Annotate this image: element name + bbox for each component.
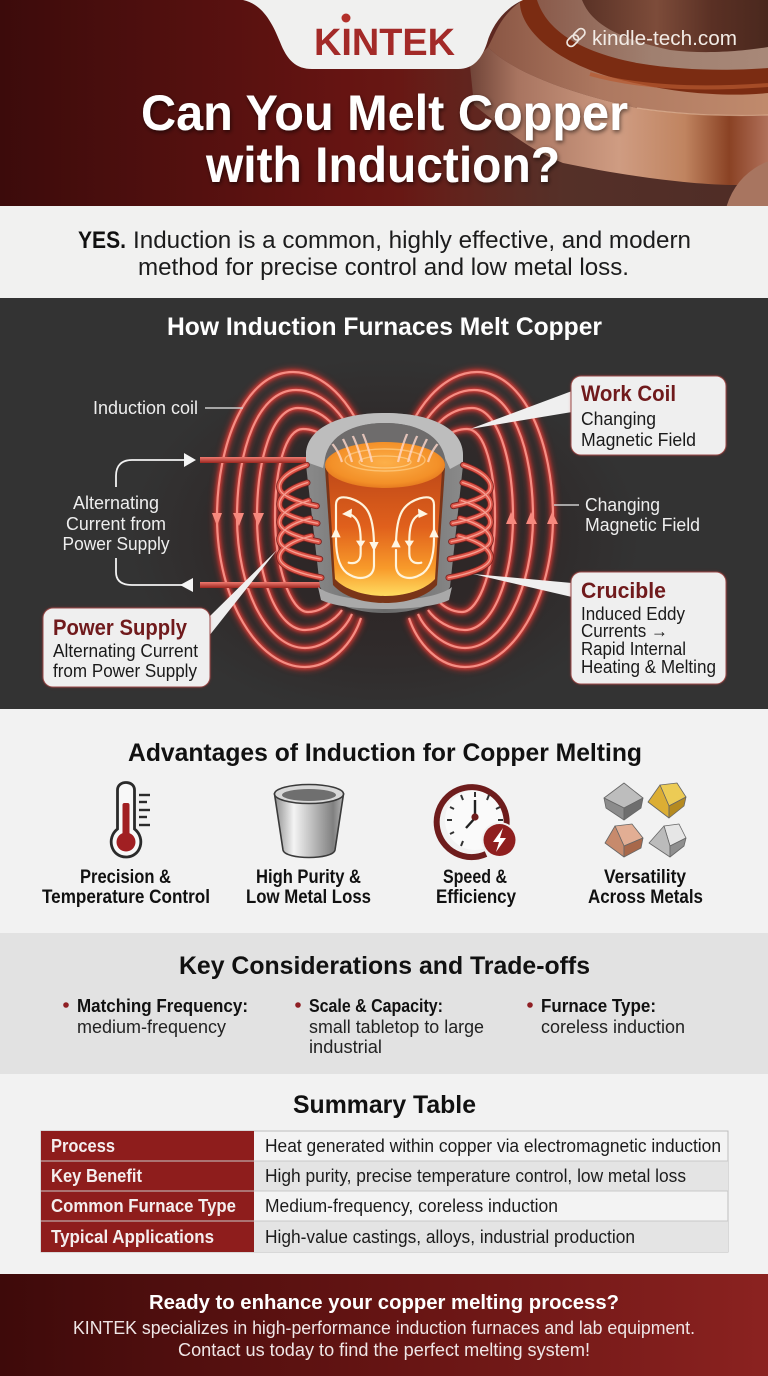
row: process: [51, 1136, 721, 1156]
advantage: high purity: [246, 784, 371, 908]
bullet: scale and capacity: industrial: [309, 1036, 382, 1057]
advantage: versatility: [588, 783, 703, 908]
diagram: copper work coil: [279, 465, 491, 578]
panel: short answer: Induction is a common, highly effective, and modern: [133, 227, 691, 254]
advantage: precision and temperature control: Temperature Control: [42, 887, 210, 908]
panel: call to action footer: Contact us today to find the perfect melting system!: [178, 1339, 590, 1360]
panel: summary table: [0, 1074, 768, 1274]
advantage: precision and temperature control: Precision &: [80, 867, 171, 888]
callout: crucible: Crucible: [581, 578, 666, 603]
logo: KINTEK: KINTEK: [314, 22, 456, 64]
callout: work coil: [470, 376, 726, 455]
title: with Induction?: [205, 137, 560, 193]
label: changing magnetic field: [554, 494, 700, 535]
row: typical applications: High-value castings, alloys, industrial production: [265, 1227, 635, 1247]
callout: work coil: Changing: [581, 409, 656, 429]
diagram: eddy current arrows: [331, 497, 439, 578]
heading: Key Considerations and Trade-offs: [179, 952, 590, 980]
callout: crucible: [473, 572, 726, 684]
panel: advantages: [0, 709, 768, 933]
row: process: Process: [51, 1136, 115, 1156]
bullet: furnace type: coreless induction: [541, 1016, 685, 1037]
advantage: precision and temperature control: [42, 782, 210, 908]
advantage: high purity: High Purity &: [256, 867, 361, 888]
label: alternating current with arrows: Alternating: [73, 492, 159, 513]
row: typical applications: Typical Applications: [51, 1227, 214, 1247]
row: typical applications: [51, 1227, 635, 1247]
logo tab: [243, 0, 523, 69]
diagram: crucible with molten copper: [306, 413, 463, 613]
website link: kindle-tech.com: [592, 28, 737, 50]
callout: crucible: Rapid Internal: [581, 639, 686, 659]
advantage: versatility: Versatility: [604, 867, 686, 888]
heading: Advantages of Induction for Copper Melting: [128, 739, 642, 767]
image: copper rings: [470, 0, 768, 293]
callout: crucible: Induced Eddy: [581, 604, 685, 624]
row: common furnace type: Medium-frequency, coreless induction: [265, 1196, 558, 1216]
label: alternating current with arrows: Current from: [66, 513, 166, 534]
icon: metal ingots: [604, 783, 686, 857]
diagram: power feed bars: [200, 457, 320, 588]
panel: short answer: [0, 206, 768, 298]
heading: Summary Table: [293, 1091, 476, 1119]
bullet: scale and capacity: [295, 995, 484, 1057]
callout: work coil: Work Coil: [581, 381, 676, 406]
advantage: high purity: Low Metal Loss: [246, 887, 371, 908]
table: [41, 1131, 728, 1252]
title: Can You Melt Copper: [141, 85, 628, 141]
panel: header banner: [0, 0, 768, 293]
callout: power supply: [43, 550, 277, 687]
callout: crucible: Currents →: [581, 621, 668, 641]
label: alternating current with arrows: Power Supply: [62, 533, 170, 554]
callout: power supply: Power Supply: [53, 615, 188, 640]
panel: key considerations: [0, 933, 768, 1074]
row: key benefit: Key Benefit: [51, 1166, 142, 1186]
icon: clock with lightning: [437, 787, 518, 858]
label: changing magnetic field: Magnetic Field: [585, 514, 700, 535]
panel: short answer: method for precise control and low metal loss.: [138, 254, 629, 281]
callout: power supply: from Power Supply: [53, 661, 197, 681]
callout: work coil: Magnetic Field: [581, 430, 696, 450]
advantage: speed and efficiency: [436, 787, 518, 908]
advantage: versatility: Across Metals: [588, 887, 703, 908]
title: [141, 85, 628, 193]
bullet: matching frequency: [63, 995, 248, 1037]
panel: how induction furnaces work: [0, 298, 768, 709]
advantage: speed and efficiency: Efficiency: [436, 887, 516, 908]
icon: crucible cup: [274, 784, 344, 858]
callout: power supply: Alternating Current: [53, 641, 198, 661]
label: induction coil: Induction coil: [93, 398, 198, 418]
row: common furnace type: [51, 1196, 558, 1216]
row: process: Heat generated within copper via electromagnetic induction: [265, 1136, 721, 1156]
heading: How Induction Furnaces Melt Copper: [167, 313, 602, 341]
callout: crucible: Heating & Melting: [581, 657, 716, 677]
bullet: matching frequency: Matching Frequency:: [77, 995, 248, 1016]
bullet: furnace type: [527, 995, 685, 1037]
panel: call to action footer: Ready to enhance your copper melting process?: [149, 1291, 619, 1314]
diagram: magnetic field lines: [212, 372, 558, 667]
panel: call to action footer: KINTEK specializes in high-performance induction furnaces and lab equipment.: [73, 1317, 695, 1338]
panel: call to action footer: [0, 1274, 768, 1376]
icon: thermometer: [111, 782, 150, 857]
bullet: scale and capacity: small tabletop to large: [309, 1016, 484, 1037]
row: key benefit: [51, 1166, 686, 1186]
label: alternating current with arrows: [62, 453, 196, 592]
row: common furnace type: Common Furnace Type: [51, 1196, 236, 1216]
bullet: matching frequency: medium-frequency: [77, 1016, 227, 1037]
bullet: scale and capacity: Scale & Capacity:: [309, 995, 443, 1016]
label: changing magnetic field: Changing: [585, 494, 660, 515]
bullet: furnace type: Furnace Type:: [541, 995, 656, 1016]
advantage: speed and efficiency: Speed &: [443, 867, 507, 888]
row: key benefit: High purity, precise temperature control, low metal loss: [265, 1166, 686, 1186]
panel: short answer: YES.: [78, 227, 126, 254]
